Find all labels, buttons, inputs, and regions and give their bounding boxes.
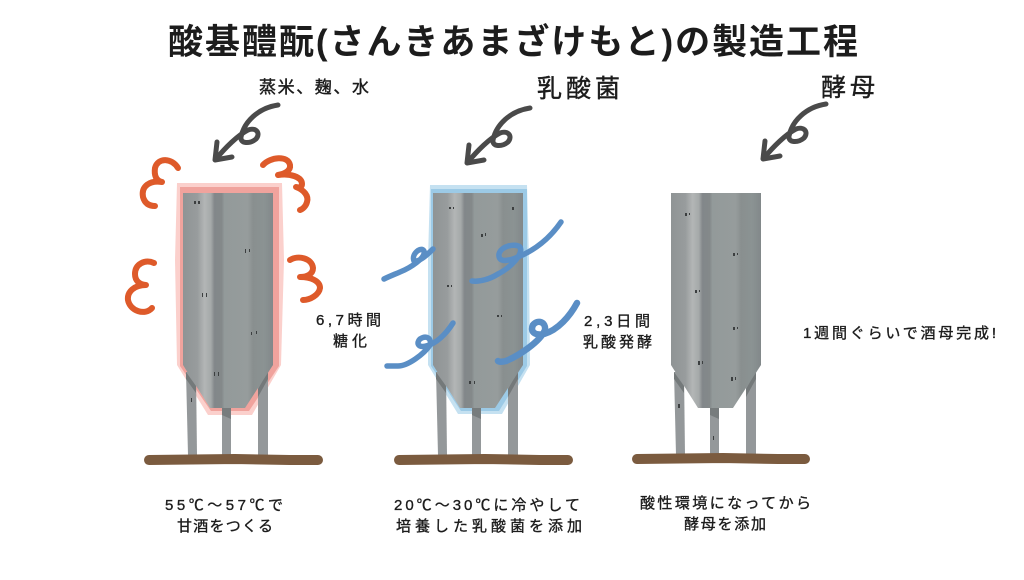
note: about one week to finish: 1週間ぐらいで酒母完成! <box>803 325 996 342</box>
arrow 2 <box>467 108 530 163</box>
caption 3 <box>640 495 811 533</box>
cooling marks <box>384 222 577 366</box>
note: 2-3 days lactic fermentation: 2,3日間 <box>584 313 650 330</box>
note: 6-7 hours saccharification: 6,7時間 <box>316 312 381 329</box>
cool glow <box>428 185 530 414</box>
caption 2: 20℃～30℃に冷やして <box>394 497 580 514</box>
note: 6-7 hours saccharification <box>316 312 381 350</box>
caption 1: 甘酒をつくる <box>177 518 273 535</box>
note: 2-3 days lactic fermentation: 乳酸発酵 <box>583 334 652 351</box>
heated tank <box>149 183 318 460</box>
caption 1: 55℃～57℃で <box>165 497 283 514</box>
title: 酸基醴酛(さんきあまざけもと)の製造工程 <box>168 22 858 62</box>
tank legs and body <box>183 193 273 455</box>
caption 3: 酸性環境になってから <box>640 495 811 512</box>
heat marks <box>128 158 320 312</box>
warm glow <box>175 183 284 415</box>
ground <box>149 459 318 460</box>
ground <box>637 458 805 459</box>
tank legs and body <box>433 193 523 455</box>
label: yeast: 酵母 <box>821 74 875 102</box>
ground <box>399 459 568 460</box>
note: 2-3 days lactic fermentation <box>583 313 652 351</box>
cooled tank <box>399 185 568 460</box>
arrow 3 <box>763 104 826 159</box>
arrow 1 <box>215 105 278 160</box>
note: 6-7 hours saccharification: 糖化 <box>333 333 367 350</box>
label: steamed rice, koji, water: 蒸米、麹、水 <box>259 78 369 97</box>
caption 1 <box>165 497 283 535</box>
tank legs and body <box>671 193 761 455</box>
caption 2 <box>394 497 582 535</box>
label: lactic acid bacteria: 乳酸菌 <box>537 75 620 103</box>
caption 2: 培養した乳酸菌を添加 <box>396 518 582 535</box>
yeast tank <box>637 193 805 459</box>
caption 3: 酵母を添加 <box>684 516 766 533</box>
